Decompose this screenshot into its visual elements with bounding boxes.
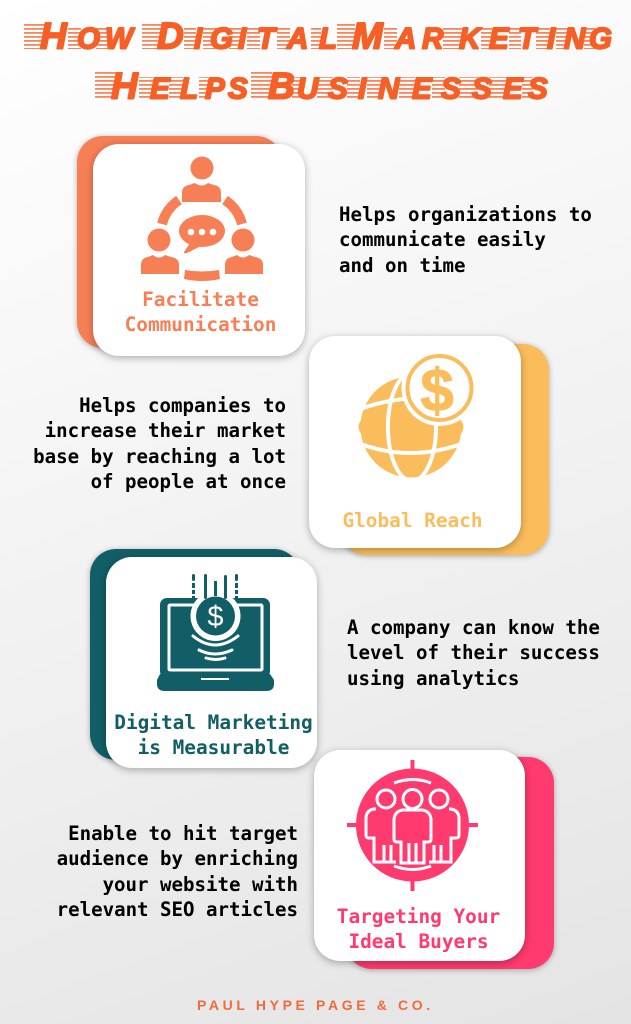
title: P	[205, 72, 225, 106]
title: I	[358, 72, 367, 106]
title	[24, 16, 612, 106]
title: E	[412, 72, 433, 106]
footer brand: PAUL HYPE PAGE & CO.	[197, 997, 434, 1013]
title: M	[352, 16, 383, 56]
icon: globe with dollar coin: $	[420, 357, 454, 424]
card backing: teal	[90, 549, 300, 760]
label: Digital Marketing is Measurable	[114, 711, 313, 759]
title: S	[228, 72, 248, 106]
title: I	[194, 22, 203, 56]
panel: digital marketing is measurable	[86, 546, 322, 774]
icon: target audience	[347, 760, 478, 891]
title: L	[180, 72, 198, 106]
icon: globe with dollar coin	[358, 354, 474, 478]
title: I	[238, 22, 247, 56]
card backing: yellow	[340, 344, 549, 555]
title: U	[297, 72, 319, 106]
card backing: pink	[346, 757, 554, 969]
title: E	[150, 72, 171, 106]
icon: laptop with dollar coin: $	[207, 601, 224, 633]
title: H	[111, 66, 138, 106]
title: H	[40, 16, 67, 56]
text: targeting description: Enable to hit target audience by enriching your website with relevant SEO articles	[57, 822, 298, 921]
title: O	[77, 22, 100, 56]
title: S	[328, 72, 348, 106]
card: white	[93, 144, 305, 356]
title: I	[547, 22, 556, 56]
title: G	[589, 22, 612, 56]
label: Facilitate Communication	[125, 288, 276, 336]
icon: laptop with dollar coin	[157, 574, 274, 691]
title: L	[319, 22, 337, 56]
panel: targeting your ideal buyers	[310, 748, 558, 974]
title: N	[564, 22, 586, 56]
title: B	[268, 66, 295, 106]
label: Targeting Your Ideal Buyers	[337, 905, 500, 953]
card: white	[106, 557, 317, 768]
label: Global Reach	[342, 509, 483, 532]
title: N	[378, 72, 400, 106]
title: T	[518, 22, 539, 56]
title: S	[441, 72, 461, 106]
title: G	[210, 22, 233, 56]
panel: facilitate communication	[74, 134, 310, 362]
panel: global reach	[304, 334, 552, 560]
title: D	[157, 16, 184, 56]
card: white	[309, 336, 521, 548]
title: W	[105, 22, 135, 56]
title: E	[503, 72, 524, 106]
title: A	[394, 22, 416, 56]
card backing: orange	[77, 136, 282, 348]
text: communication description: Helps organizations to communicate easily and on time	[339, 203, 592, 277]
title: E	[489, 22, 510, 56]
icon: people in conversation	[141, 156, 263, 281]
title: A	[286, 22, 308, 56]
title: K	[459, 22, 483, 56]
title: S	[472, 72, 492, 106]
title: R	[422, 22, 444, 56]
text: global reach description: Helps companies to increase their market base by reaching a lot of people at once	[33, 394, 286, 493]
title: S	[528, 72, 548, 106]
text: measurable description: A company can know the level of their success using analytics	[347, 616, 600, 690]
title: T	[257, 22, 278, 56]
card: white	[314, 750, 525, 961]
